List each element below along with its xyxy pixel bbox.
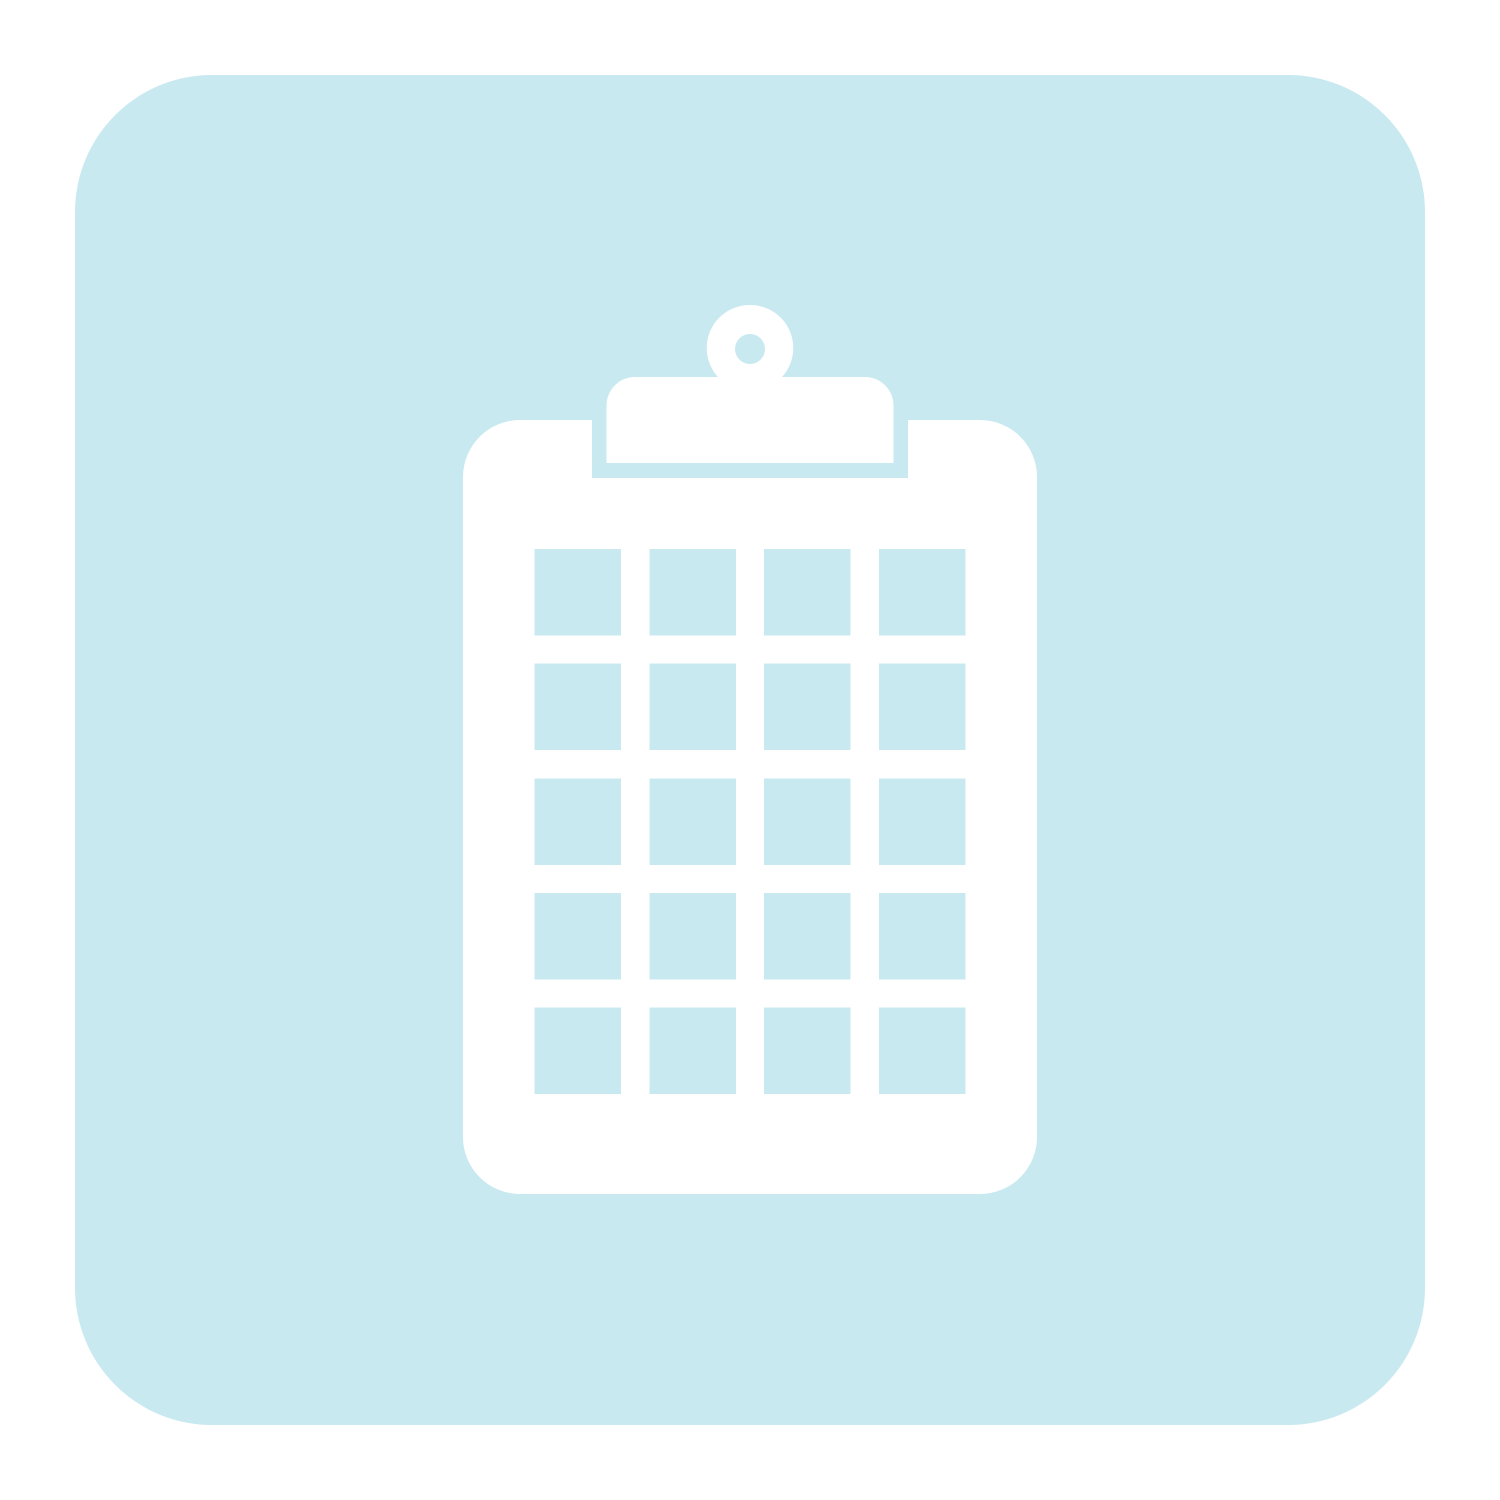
clip ring: [707, 305, 793, 377]
clip body: [606, 377, 894, 463]
icon: clipboard: [463, 305, 1037, 1194]
calendar grid: [534, 549, 966, 1094]
clipboard board: [463, 420, 1037, 1194]
